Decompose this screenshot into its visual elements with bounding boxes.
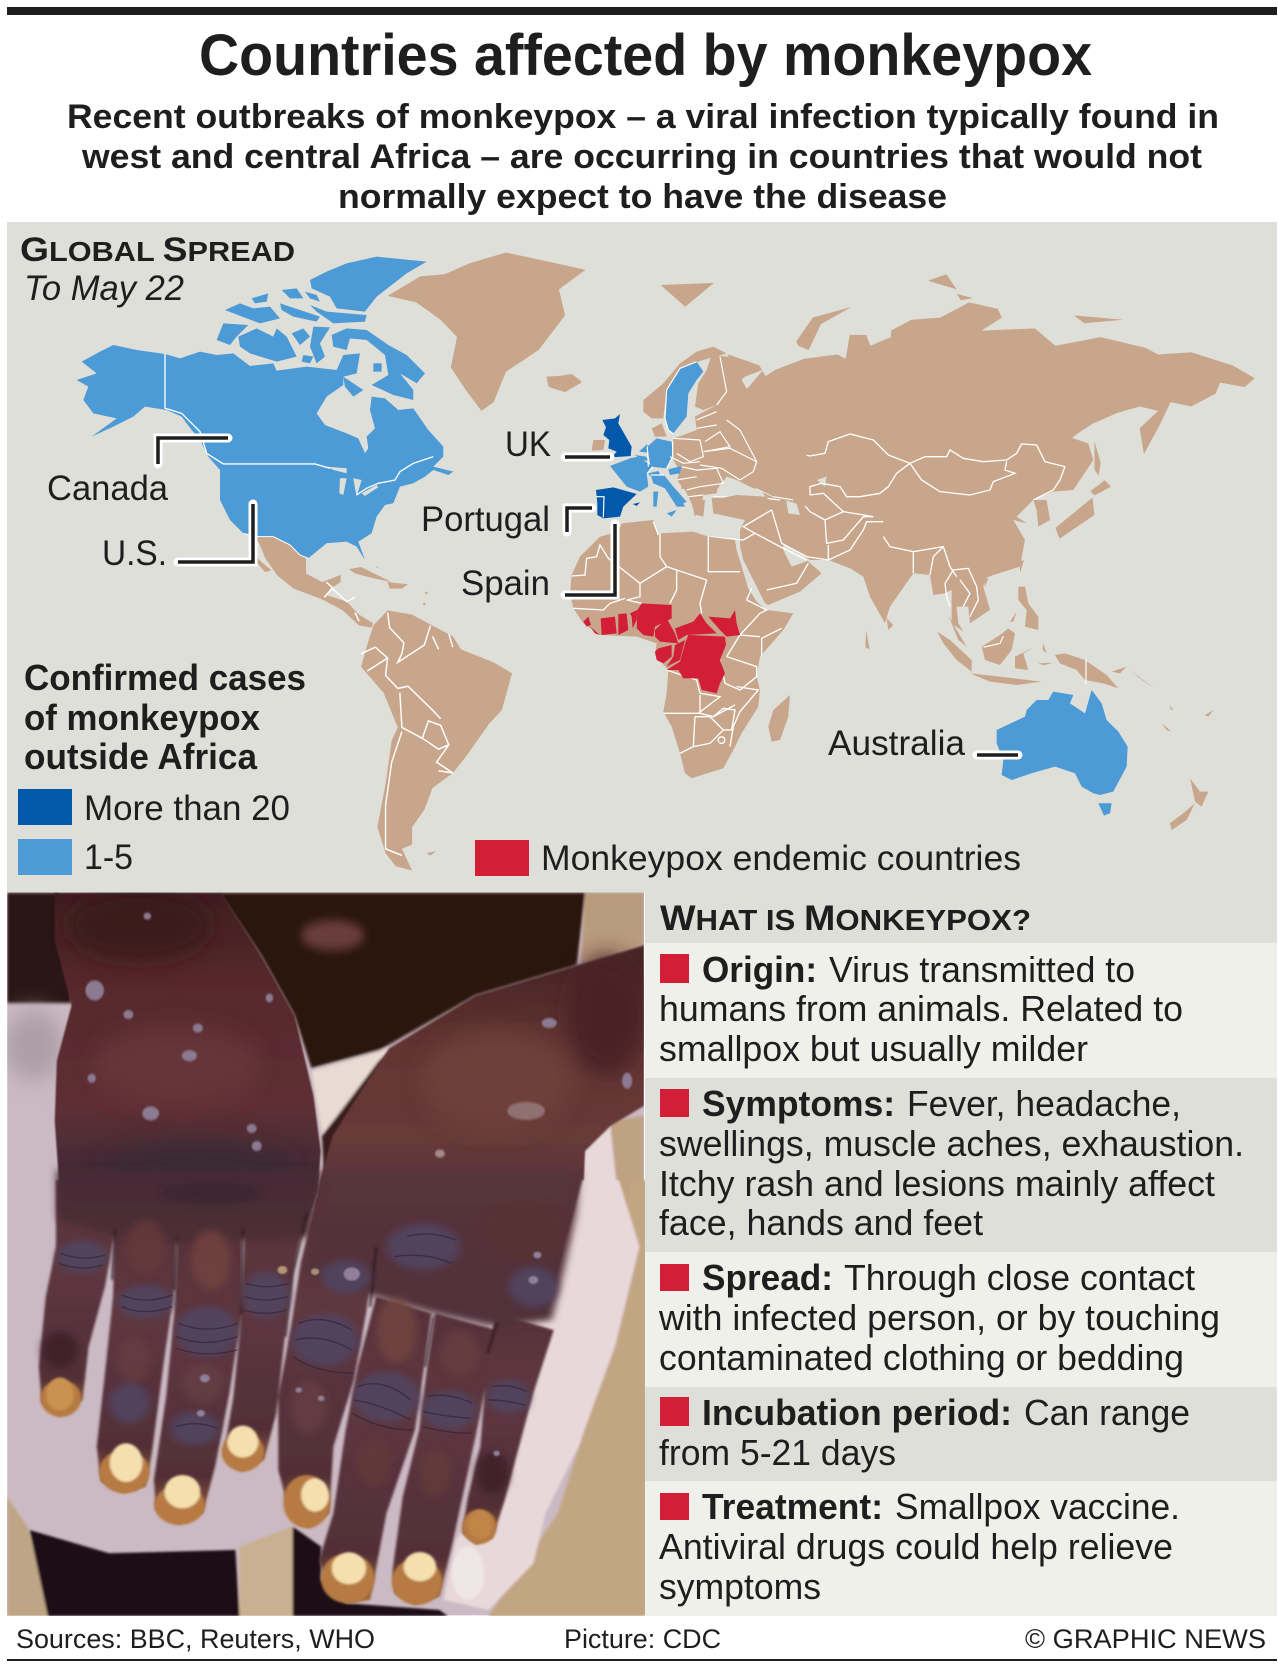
- Greenland and Iceland: [388, 253, 585, 411]
- row: origin: Virus transmitted to: [829, 949, 1135, 990]
- legend heading: Confirmed cases: [24, 657, 306, 698]
- finger lesions: [197, 1252, 541, 1456]
- Europe borders: [596, 357, 793, 517]
- row: incubation period: Can range: [1024, 1392, 1190, 1433]
- northern Eurasia and islands: [661, 274, 1255, 649]
- row: spread: contaminated clothing or bedding: [659, 1337, 1184, 1378]
- row: symptoms: Symptoms:: [702, 1083, 895, 1124]
- row: treatment: Antiviral drugs could help relieve: [659, 1526, 1173, 1567]
- leader: UK: [565, 452, 610, 462]
- footer: Sources: BBC, Reuters, WHO: [16, 1624, 375, 1654]
- subtitle: normally expect to have the disease: [338, 178, 947, 216]
- Great Lakes: [327, 467, 378, 497]
- Korea, Taiwan, Hainan, Sri Lanka: [887, 500, 1050, 630]
- row: symptoms: [645, 1078, 1277, 1252]
- row: incubation period: Incubation period:: [702, 1392, 1012, 1433]
- row: spread: with infected person, or by touching: [658, 1297, 1220, 1338]
- row: spread: [645, 1252, 1277, 1387]
- row: origin: [645, 943, 1277, 1078]
- row: origin: smallpox but usually milder: [659, 1028, 1088, 1069]
- lighter finger segments: [120, 1220, 476, 1490]
- Mexico, Central America, Caribbean: [247, 533, 428, 628]
- New Guinea border and Borneo border: [983, 636, 1086, 684]
- legend: 1-5: 1-5: [84, 838, 133, 877]
- row: treatment: Treatment:: [702, 1486, 883, 1527]
- shirt hem, legs and ground: [7, 1180, 647, 1616]
- row: origin: humans from animals. Related to: [659, 988, 1183, 1029]
- purple knuckles: [57, 1223, 558, 1445]
- row: symptoms: Itchy rash and lesions mainly affect: [659, 1163, 1215, 1204]
- Asia: [661, 274, 1255, 649]
- Asia borders: [707, 434, 1065, 617]
- heading: [645, 893, 1277, 943]
- country labels: Canada: [47, 469, 169, 508]
- Black Sea: [717, 477, 757, 497]
- leader: Canada: [158, 438, 228, 464]
- row: spread: Through close contact: [844, 1257, 1195, 1298]
- world map: [77, 253, 1255, 871]
- country labels: U.S.: [102, 534, 167, 573]
- footer: [7, 1624, 1277, 1661]
- eastern Europe and Nordics: [547, 347, 807, 517]
- fingertips and nails: [40, 1377, 497, 1605]
- leader: Australia: [977, 750, 1018, 760]
- finger gaps: [112, 1213, 497, 1367]
- Africa landmass: [570, 520, 793, 778]
- South America: [361, 610, 512, 871]
- North America borders: [165, 354, 433, 495]
- finger shadows: [42, 1182, 509, 1495]
- leader: Portugal: [567, 508, 592, 532]
- row: incubation period: [645, 1387, 1277, 1481]
- affected: dark-blue UK, Spain, Portugal: [596, 414, 640, 518]
- legend: 1-5: [18, 838, 133, 877]
- leader: Spain: [565, 524, 615, 595]
- back of hands lower: [57, 1170, 580, 1327]
- legend heading: outside Africa: [24, 736, 258, 777]
- heading: global spread: GLOBAL SPREAD: [20, 231, 295, 269]
- legend heading: of monkeypox: [24, 697, 260, 738]
- panel: map: [7, 222, 1277, 893]
- subtitle: Recent outbreaks of monkeypox – a viral infection typically found in: [67, 98, 1219, 136]
- southern Asia: [707, 430, 1093, 632]
- row: treatment: [645, 1481, 1277, 1616]
- row: treatment: symptoms: [659, 1566, 821, 1607]
- photo upper part: torso and backs of hands: [4, 890, 644, 1615]
- Central America borders: [324, 582, 359, 621]
- date: To May 22: [24, 269, 184, 308]
- endemic countries in red: [583, 603, 740, 693]
- Africa borders: [572, 522, 782, 753]
- Europe: [547, 347, 807, 518]
- legend: [18, 657, 1021, 878]
- top bar: [7, 7, 1277, 15]
- White Sea: [741, 370, 763, 389]
- islands: [661, 274, 1123, 649]
- Greenland, Central and South America: [247, 253, 585, 871]
- wrinkles: [58, 1234, 527, 1433]
- row: symptoms: face, hands and feet: [659, 1202, 983, 1243]
- Australia: [997, 690, 1128, 816]
- Mexico border shade: [243, 533, 308, 558]
- row: treatment: Smallpox vaccine.: [895, 1486, 1180, 1527]
- legend heading: [24, 657, 306, 777]
- country labels: UK: [505, 425, 551, 464]
- row: symptoms: swellings, muscle aches, exhaustion.: [659, 1123, 1244, 1164]
- legend: endemic: Monkeypox endemic countries: [541, 839, 1021, 878]
- Africa: [570, 520, 793, 778]
- country labels: [47, 425, 966, 763]
- Madagascar: [768, 695, 790, 742]
- row: spread: Spread:: [702, 1257, 833, 1298]
- title: Countries affected by monkeypox: [199, 23, 1092, 88]
- Indonesia and Pacific islands: [937, 587, 1213, 732]
- subtitle: west and central Africa – are occurring in countries that would not: [81, 138, 1202, 176]
- footer: Picture: CDC: [564, 1624, 721, 1654]
- country labels: Portugal: [421, 500, 550, 539]
- heading: WHAT IS MONKEYPOX?: [660, 899, 1031, 938]
- country labels: Spain: [461, 564, 550, 603]
- upper lesions: [85, 913, 632, 1158]
- footer: © GRAPHIC NEWS: [1025, 1624, 1266, 1654]
- South America borders: [361, 612, 453, 855]
- country labels: Australia: [828, 724, 966, 763]
- photo lower part: fingers: [7, 1170, 647, 1616]
- photo: hands with monkeypox lesions: [4, 890, 647, 1616]
- legend: more than 20: More than 20: [84, 789, 290, 828]
- Caspian, Aral, Black Sea, Gulf: [713, 475, 827, 567]
- leader: U.S.: [178, 504, 253, 562]
- shading on hands: [67, 890, 644, 1194]
- affected: light-blue countries: [610, 362, 703, 517]
- row: origin: Origin:: [702, 949, 817, 990]
- South Georgia: [426, 851, 437, 855]
- row: symptoms: Fever, headache,: [907, 1083, 1181, 1124]
- Canada and U.S.: [77, 257, 453, 560]
- finger shapes: [39, 1180, 554, 1605]
- North America: [77, 257, 453, 560]
- panel: what is monkeypox: [645, 893, 1277, 1616]
- subtitle: [67, 98, 1219, 216]
- New Zealand: [1170, 778, 1208, 830]
- row: incubation period: from 5-21 days: [659, 1432, 896, 1473]
- Indonesia, Pacific and Australia: [937, 587, 1213, 830]
